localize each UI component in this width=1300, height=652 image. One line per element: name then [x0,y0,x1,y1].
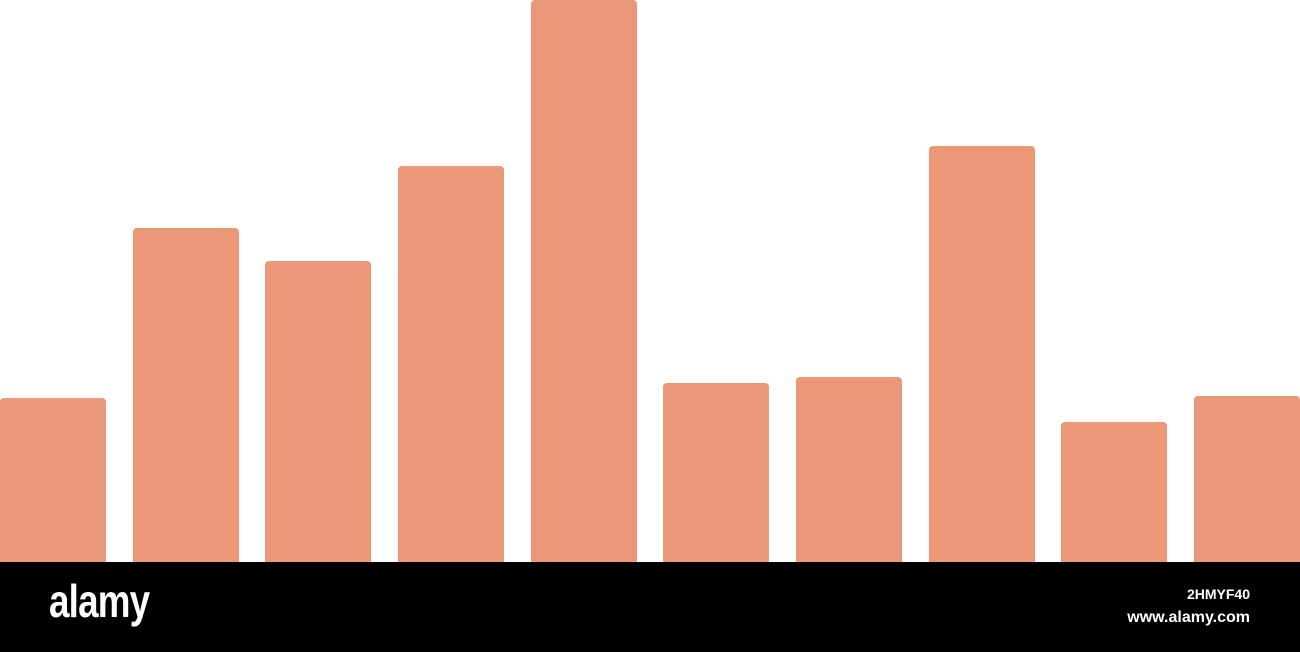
bar 8 [929,146,1035,562]
bar 9 [1061,422,1167,562]
bar 1 [0,398,106,562]
bar 5 [531,0,637,562]
bar 6 [663,383,769,562]
bar 4 [398,166,504,562]
bar 2 [133,228,239,562]
logo text: alamy [49,575,149,627]
footer band [0,562,1300,652]
image id: 2HMYF40 [1187,586,1250,602]
website: www.alamy.com [1127,609,1250,626]
bar 7 [796,377,902,562]
bar 3 [265,261,371,562]
bar 10 [1194,396,1300,562]
